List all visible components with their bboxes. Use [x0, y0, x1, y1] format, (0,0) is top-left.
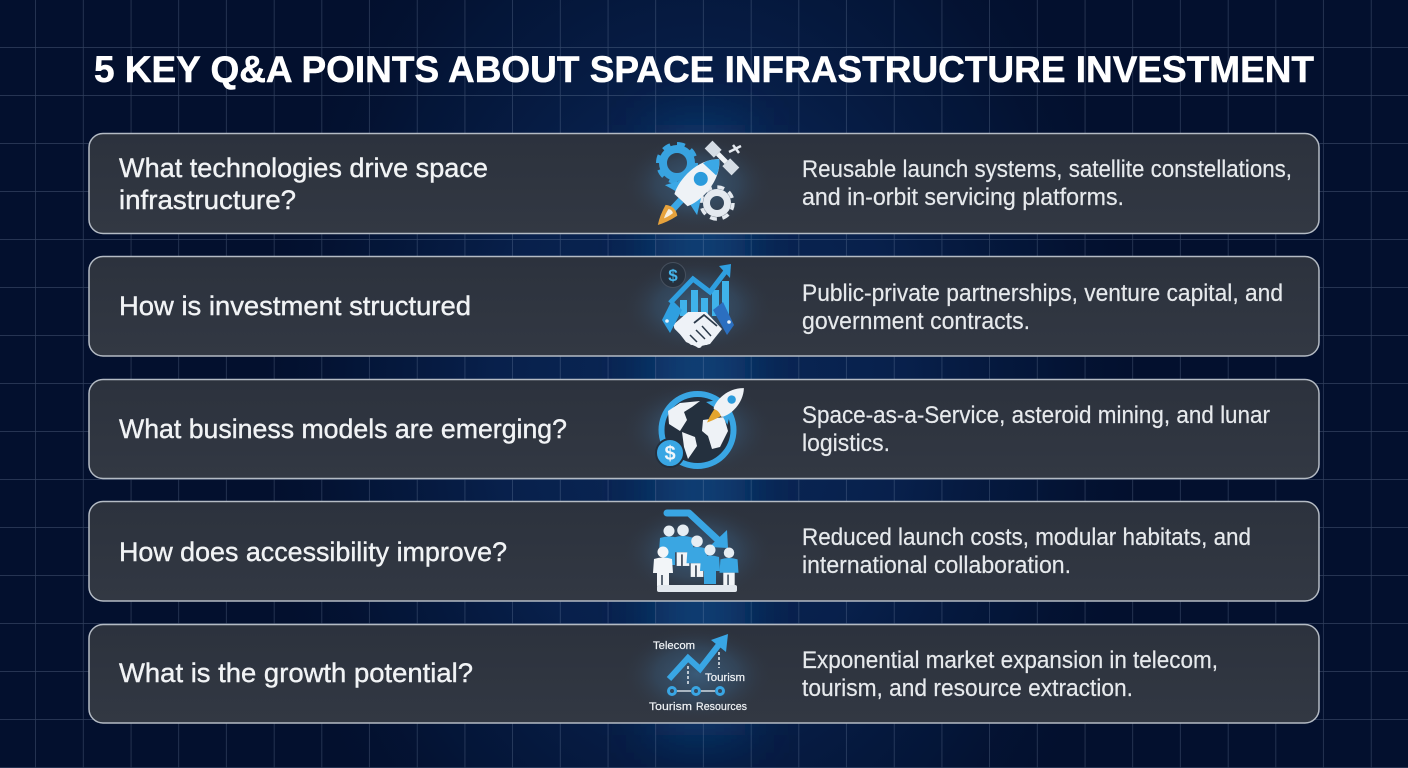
question: How does accessibility improve?	[119, 537, 507, 567]
answer	[802, 280, 1283, 335]
panel: technologies	[89, 134, 1319, 240]
card background	[89, 624, 1319, 723]
question: What business models are emerging?	[119, 414, 567, 444]
question: infrastructure?	[119, 185, 296, 215]
icon: growth chart with labels	[649, 634, 747, 713]
answer	[802, 647, 1218, 702]
answer: tourism, and resource extraction.	[802, 675, 1133, 702]
answer	[802, 156, 1292, 211]
icon: people under falling cost arrow	[653, 513, 738, 592]
answer	[802, 402, 1270, 457]
question: How is investment structured	[119, 291, 471, 321]
question: What technologies drive space	[119, 153, 488, 183]
answer: and in-orbit servicing platforms.	[802, 184, 1124, 211]
panel: growth potential	[89, 624, 1319, 723]
card background	[89, 256, 1319, 356]
icon: rocket with gears and satellite	[642, 141, 741, 240]
card background	[89, 380, 1319, 478]
card background	[89, 502, 1319, 601]
answer: logistics.	[802, 430, 890, 457]
icon: handshake with rising chart	[660, 262, 734, 347]
answer: Reusable launch systems, satellite constellations,	[802, 156, 1292, 183]
answer: Exponential market expansion in telecom,	[802, 647, 1218, 674]
answer: international collaboration.	[802, 552, 1071, 579]
title: 5 KEY Q&A POINTS ABOUT SPACE INFRASTRUCTURE INVESTMENT	[94, 48, 1314, 90]
icon: growth chart with labels: Resources	[696, 701, 747, 713]
panel: investment structure	[89, 256, 1319, 356]
icon: handshake with rising chart: $	[668, 266, 678, 285]
icon: growth chart with labels: Tourism	[705, 672, 745, 684]
icon: globe with rocket and dollar coin: $	[664, 443, 676, 465]
question	[119, 153, 488, 215]
icon: globe with rocket and dollar coin	[656, 377, 755, 467]
icon: growth chart with labels: Telecom	[653, 640, 695, 652]
card background	[89, 134, 1319, 234]
answer	[802, 524, 1251, 579]
answer: Space-as-a-Service, asteroid mining, and lunar	[802, 402, 1270, 429]
icon: growth chart with labels: Tourism	[649, 701, 692, 713]
panel: accessibility	[89, 502, 1319, 601]
answer: government contracts.	[802, 308, 1030, 335]
answer: Public-private partnerships, venture capital, and	[802, 280, 1283, 307]
question: What is the growth potential?	[119, 658, 473, 688]
panel: business models	[89, 377, 1319, 478]
answer: Reduced launch costs, modular habitats, and	[802, 524, 1251, 551]
